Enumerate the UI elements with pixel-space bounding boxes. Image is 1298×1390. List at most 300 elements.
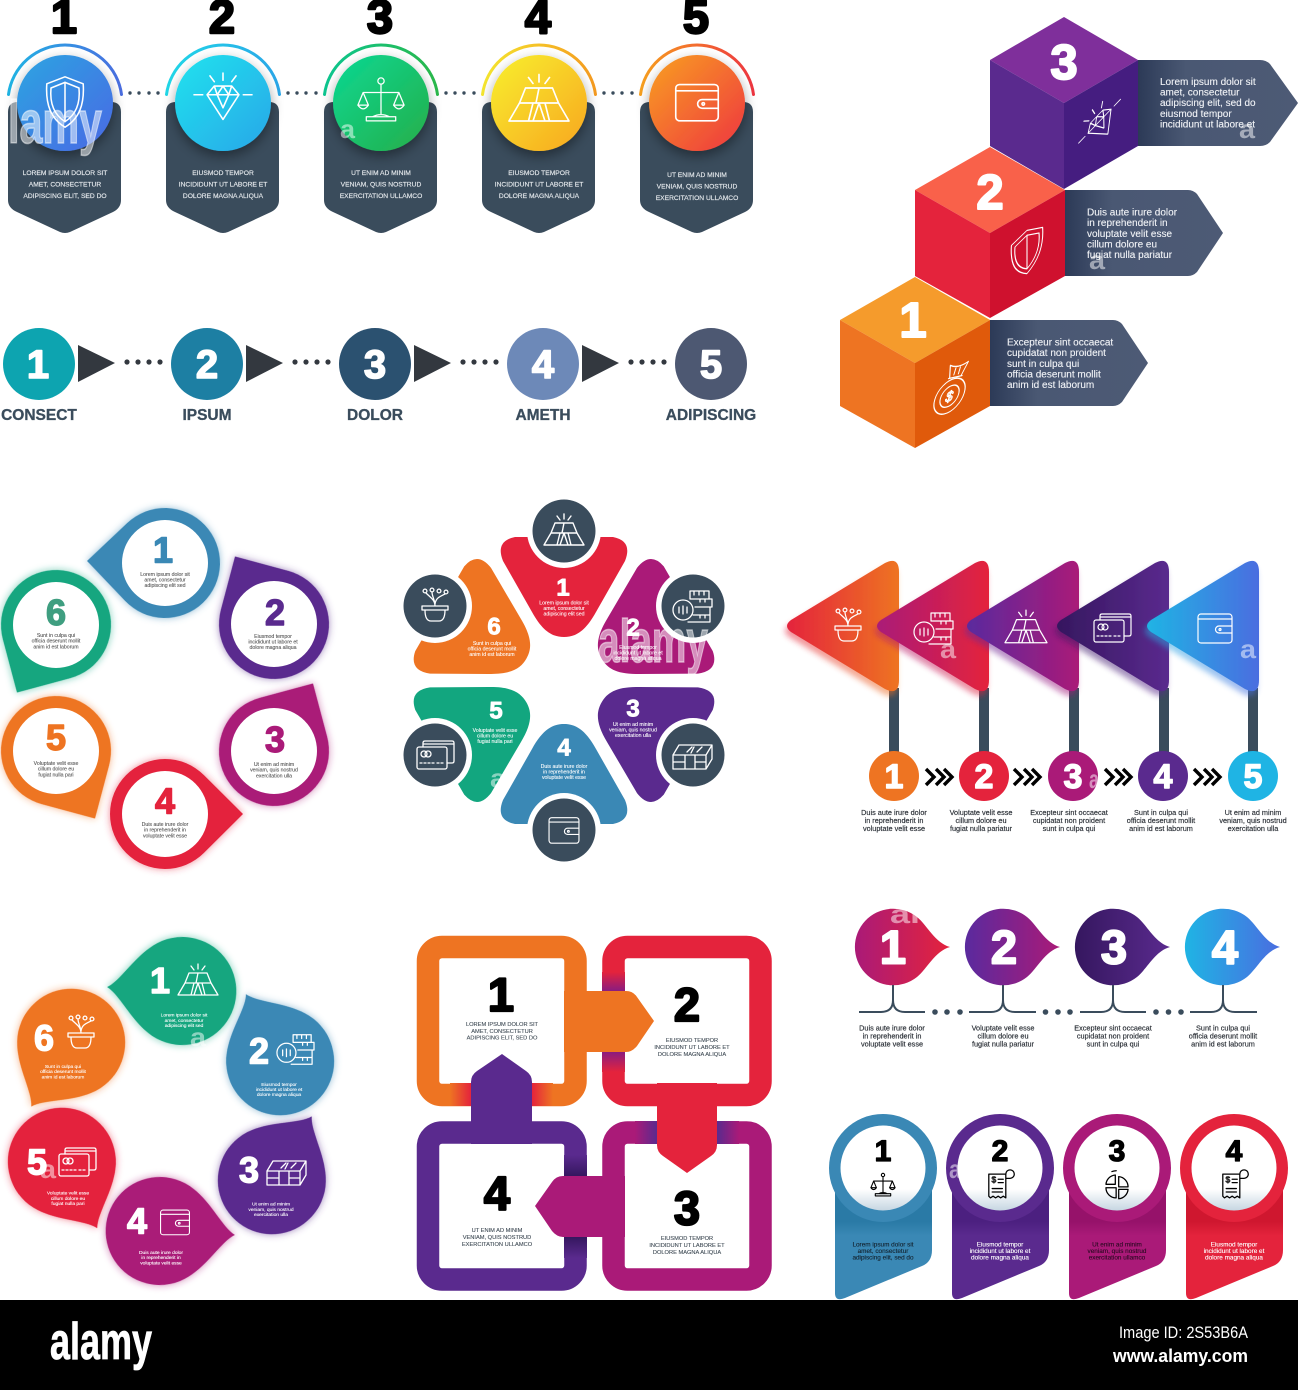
ring 3: exercitation ulla — [256, 773, 292, 779]
petal 1: Lorem ipsum dolor sit — [539, 600, 589, 606]
icon: wallet — [676, 84, 718, 121]
step 4: AMETH — [515, 407, 571, 424]
ring 2: Eiusmod tempor — [254, 634, 292, 640]
card text 1: LOREM IPSUM DOLOR SIT — [23, 170, 107, 177]
step 4: 4 — [532, 343, 555, 387]
teardrop 2: dolore magna aliqua — [257, 1092, 301, 1098]
petal 4 — [501, 724, 627, 867]
step 5: 5 — [700, 343, 722, 387]
drop 4 — [1185, 909, 1280, 1048]
ring 6: 6 — [46, 592, 66, 633]
drop 1: in reprehenderit in — [863, 1032, 921, 1040]
petal 6: officia deserunt mollit — [468, 646, 517, 652]
chevrons 1 — [926, 769, 952, 785]
callout text 1: anim id est laborum — [1007, 380, 1094, 391]
petal 2: dolore magna aliqua — [614, 656, 662, 662]
teardrop 2 — [198, 970, 353, 1134]
step 4 — [507, 328, 579, 424]
ring 5 — [0, 676, 143, 846]
connector dots 1 — [128, 91, 160, 95]
card text 4: INCIDIDUNT UT LABORE ET — [495, 182, 583, 188]
arc 3 — [324, 45, 438, 94]
callout text 3: Lorem ipsum dolor sit — [1160, 77, 1256, 88]
petal 4: voluptate velit esse — [542, 775, 586, 781]
flag 5 — [1147, 561, 1259, 691]
ring 2: 2 — [265, 592, 285, 633]
teardrop 5: Voluptate velit esse — [47, 1190, 89, 1196]
step text 5: exercitation ulla — [1228, 824, 1279, 833]
pin card 3: 3 — [1109, 1135, 1125, 1168]
watermarks: a — [40, 1154, 57, 1184]
ring 1: Lorem ipsum dolor sit — [140, 572, 190, 578]
ring 2: incididunt ut labore et — [248, 640, 298, 646]
column 1 — [8, 0, 122, 233]
cube 3: 3 — [1050, 36, 1078, 90]
pin card 4 — [1180, 1114, 1288, 1299]
arc 1 — [8, 45, 122, 94]
connector dots 3 — [444, 91, 476, 95]
step text 1: in reprehenderit in — [865, 816, 923, 825]
cube 1 — [840, 277, 990, 448]
card text 3: VENIAM, QUIS NOSTRUD — [341, 182, 421, 188]
callout text 1: Excepteur sint occaecat — [1007, 338, 1113, 348]
footer logo: alamy — [50, 1313, 152, 1371]
teardrop 3: Ut enim ad minim — [252, 1202, 290, 1208]
watermarks: a — [190, 1022, 207, 1052]
teardrop 4: in reprehenderit in — [141, 1255, 181, 1261]
callout text 3: adipiscing elit, sed do — [1160, 98, 1256, 109]
pin card 2: incididunt ut labore et — [970, 1248, 1031, 1255]
step 2 — [171, 328, 243, 424]
drop 4: Sunt in culpa qui — [1196, 1024, 1250, 1032]
ring 5: Voluptate velit esse — [34, 761, 78, 767]
image id: Image ID: 2S53B6A — [1119, 1323, 1249, 1342]
column 5 — [640, 0, 754, 233]
teardrop 3: veniam, quis nostrud — [248, 1207, 294, 1213]
square text 1 — [466, 968, 539, 1042]
callout text 1: sunt in culpa qui — [1007, 359, 1079, 370]
ring 1: 1 — [153, 530, 173, 570]
step text 4: officia deserunt mollit — [1127, 816, 1195, 825]
ring 1: amet, consectetur — [144, 578, 186, 584]
petal 2: 2 — [626, 614, 640, 642]
square text 4: EXERCITATION ULLAMCO — [462, 1242, 533, 1248]
cube 3 — [990, 17, 1138, 189]
square frame 3 — [614, 1132, 760, 1280]
pin card 2: dolore magna aliqua — [971, 1254, 1029, 1262]
watermarks: a — [340, 114, 356, 144]
teardrop 4: voluptate velit esse — [140, 1260, 182, 1266]
icon: scales — [358, 78, 404, 121]
pin card 1: adipiscing elit, sed do — [852, 1254, 914, 1262]
step text 1: Duis aute irure dolor — [861, 808, 927, 817]
petal 5: cillum dolore eu — [477, 734, 513, 740]
pin card 3 — [1063, 1114, 1171, 1299]
watermarks: alamy — [598, 608, 708, 675]
square text 3: DOLORE MAGNA ALIQUA — [653, 1250, 721, 1256]
petal 2 — [570, 554, 730, 714]
panel: four linked rounded squares — [428, 947, 760, 1280]
pin card 2 — [946, 1114, 1054, 1299]
ring 3 — [199, 656, 361, 826]
column 3 — [324, 0, 438, 233]
pin card 1: Lorem ipsum dolor sit — [852, 1242, 914, 1248]
callout text 3: eiusmod tempor — [1160, 109, 1232, 120]
column 4 — [482, 0, 596, 233]
square text 1: AMET, CONSECTETUR — [471, 1029, 533, 1035]
connector shading — [450, 972, 739, 1258]
circle 2 — [175, 55, 271, 151]
arc 2 — [166, 45, 280, 94]
step text 4: Sunt in culpa qui — [1134, 808, 1188, 817]
flag 2 — [877, 561, 989, 691]
square frame 4 — [428, 1132, 576, 1280]
connector dots 2 — [286, 91, 318, 95]
ring 1: adipiscing elit sed — [145, 583, 186, 589]
arrow: red connector — [657, 1083, 717, 1173]
step 3 — [339, 328, 411, 424]
square text 3: INCIDIDUNT UT LABORE ET — [649, 1243, 725, 1249]
petal 1 — [501, 494, 627, 637]
drop 3: sunt in culpa qui — [1087, 1040, 1140, 1048]
panel: five numbered circles with labelled shields — [8, 0, 754, 233]
watermarks: a — [1089, 764, 1099, 794]
step 2: IPSUM — [182, 407, 232, 424]
arrow and dots 1 — [78, 345, 163, 382]
callout text 1: cupidatat non proident — [1007, 348, 1106, 359]
square text 2 — [654, 978, 730, 1058]
ring 5: 5 — [46, 717, 66, 758]
drop 1 — [855, 909, 950, 1048]
step text 1: voluptate velit esse — [863, 824, 925, 833]
flag 4 — [1057, 561, 1169, 691]
teardrop 3: exercitation ulla — [254, 1212, 288, 1218]
cube 2: 2 — [976, 166, 1004, 220]
circle 4 — [491, 55, 587, 151]
ring 4: voluptate velit esse — [143, 833, 187, 839]
square text 4: VENIAM, QUIS NOSTRUD — [463, 1235, 531, 1241]
ring 6 — [0, 550, 131, 720]
drop 3: 3 — [1101, 920, 1127, 974]
flag pole 1 — [889, 688, 899, 754]
ring 2: dolore magna aliqua — [249, 645, 297, 651]
card text 1: AMET, CONSECTETUR — [29, 182, 101, 188]
teardrop 2: Eiusmod tempor — [261, 1082, 297, 1088]
callout text 2: fugiat nulla pariatur — [1087, 250, 1173, 261]
drop 4: 4 — [1212, 920, 1238, 974]
petal 1: 1 — [556, 574, 570, 602]
teardrop 2: 2 — [249, 1030, 269, 1072]
pin card 4: dolore magna aliqua — [1205, 1254, 1263, 1262]
drop 3: Excepteur sint occaecat — [1074, 1024, 1152, 1032]
column 2 — [166, 0, 280, 233]
petal 2: incididunt ut labore et — [613, 650, 663, 656]
square text 3 — [649, 1182, 725, 1256]
step circle 3: 3 — [1064, 758, 1082, 796]
pin card 3: veniam, quis nostrud — [1088, 1248, 1147, 1255]
watermarks: a — [1240, 634, 1257, 664]
step text 2: cillum dolore eu — [955, 816, 1007, 825]
pin card 1: amet, consectetur — [858, 1248, 909, 1255]
square text 1: LOREM IPSUM DOLOR SIT — [466, 1022, 539, 1028]
petal 4: in reprehenderit in — [543, 770, 585, 776]
teardrop 4: 4 — [127, 1200, 147, 1242]
drop 2: fugiat nulla pariatur — [972, 1040, 1035, 1048]
watermarks — [8, 89, 1257, 1184]
circle 1 — [17, 55, 113, 151]
callout arrow 1 — [990, 320, 1148, 406]
card text 4: EIUSMOD TEMPOR — [508, 170, 570, 177]
teardrop 3: 3 — [239, 1150, 259, 1190]
flag 3 — [967, 561, 1079, 691]
square text 4: 4 — [484, 1166, 510, 1220]
square text 1: ADIPISCING ELIT, SED DO — [467, 1036, 538, 1042]
petal 3: veniam, quis nostrud — [609, 728, 657, 734]
step circle 1 — [869, 751, 919, 801]
teardrop 1: adipiscing elit sed — [165, 1023, 204, 1029]
petal 5 — [398, 647, 558, 807]
card text 3: UT ENIM AD MINIM — [351, 170, 411, 177]
square text 3: EIUSMOD TEMPOR — [661, 1236, 713, 1242]
cube 2 — [915, 147, 1065, 318]
panel: gradient drops timeline — [855, 909, 1280, 1048]
square text 2: EIUSMOD TEMPOR — [666, 1038, 718, 1044]
pin card 1 — [829, 1114, 937, 1299]
teardrop 6: anim id est laborum — [42, 1074, 84, 1080]
ring 4 — [110, 759, 243, 869]
petal 6: anim id est laborum — [469, 652, 515, 658]
petal 2: Eiusmod tempor — [619, 645, 657, 651]
card text 2: INCIDIDUNT UT LABORE ET — [179, 182, 267, 188]
arrow: magenta connector — [535, 1176, 625, 1237]
step 5 — [666, 328, 756, 424]
step text 2: Voluptate velit esse — [950, 808, 1012, 817]
callout text 2: Duis aute irure dolor — [1087, 208, 1178, 218]
icon: shield — [47, 77, 83, 127]
teardrop 1: Lorem ipsum dolor sit — [161, 1012, 208, 1018]
panel: four pin cards — [829, 1114, 1288, 1299]
connector dots 4 — [602, 91, 634, 95]
drop 1: voluptate velit esse — [861, 1040, 923, 1048]
ring 2 — [187, 529, 349, 699]
drop 1: Duis aute irure dolor — [859, 1024, 925, 1032]
square text 1: 1 — [488, 968, 514, 1021]
panel: six solid teardrops — [0, 933, 358, 1289]
flag 1 — [787, 561, 899, 691]
ring 3: veniam, quis nostrud — [250, 768, 298, 774]
ring 3: 3 — [265, 719, 285, 760]
pin card 1: 1 — [875, 1135, 891, 1168]
step 1: 1 — [27, 343, 49, 387]
petal 3 — [570, 647, 730, 807]
card text 4: DOLORE MAGNA ALIQUA — [499, 193, 580, 200]
arrow and dots 2 — [246, 345, 331, 382]
step text 3: sunt in culpa qui — [1043, 824, 1096, 833]
pin card 3: Ut enim ad minim — [1092, 1242, 1142, 1248]
pin card 2: 2 — [992, 1135, 1008, 1168]
drop 4: officia deserunt mollit — [1189, 1032, 1257, 1040]
pin card 2: Eiusmod tempor — [977, 1242, 1024, 1248]
step circle 2: 2 — [975, 758, 993, 796]
chevrons 3 — [1105, 769, 1131, 785]
watermarks: a — [490, 763, 507, 793]
step 2: 2 — [196, 343, 218, 387]
teardrop 6: Sunt in culpa qui — [45, 1064, 81, 1070]
teardrop 6: 6 — [34, 1018, 54, 1058]
card text 1: ADIPISCING ELIT, SED DO — [23, 193, 107, 200]
petal 5: fugiat nulla pari — [477, 739, 513, 745]
card text 2: EIUSMOD TEMPOR — [192, 170, 254, 177]
chevrons 2 — [1014, 769, 1040, 785]
square text 2: DOLORE MAGNA ALIQUA — [658, 1052, 726, 1058]
drop 4: anim id est laborum — [1191, 1040, 1255, 1048]
callout text 2: voluptate velit esse — [1087, 229, 1172, 240]
petal 3: exercitation ulla — [615, 733, 651, 739]
teardrop 6: officia deserunt mollit — [40, 1069, 87, 1075]
arc 5 — [640, 45, 754, 94]
arrow and dots 4 — [582, 345, 667, 382]
panel: six petals around a hexagon with dark icon circles — [398, 494, 730, 867]
square text 3: 3 — [674, 1182, 700, 1234]
ring 6: anim id est laborum — [33, 644, 79, 650]
connector dots 1 — [932, 1009, 963, 1015]
connector dots 2 — [1043, 1009, 1073, 1015]
watermarks: a — [940, 634, 957, 664]
card text 5: UT ENIM AD MINIM — [667, 172, 727, 179]
card text 5: VENIAM, QUIS NOSTRUD — [657, 184, 737, 190]
step circle 2 — [959, 751, 1009, 801]
step circle 1: 1 — [885, 758, 903, 796]
step text 3: cupidatat non proident — [1033, 816, 1105, 825]
panel: process steps with arrows — [1, 328, 756, 424]
ring 4: in reprehenderit in — [144, 828, 186, 834]
drop 3: cupidatat non proident — [1077, 1032, 1149, 1040]
teardrop 4 — [103, 1174, 238, 1289]
watermarks: lamy — [8, 89, 102, 156]
petal 1: adipiscing elit sed — [544, 612, 585, 618]
arrow: orange connector — [564, 991, 654, 1052]
petal 6: Sunt in culpa qui — [473, 641, 511, 647]
footer bar — [0, 1300, 1298, 1390]
petal 3: Ut enim ad minim — [613, 722, 653, 728]
arc 4 — [482, 45, 596, 94]
flag pole 5 — [1248, 688, 1258, 754]
text card 2 — [166, 102, 279, 233]
pin card 4: 4 — [1226, 1135, 1243, 1168]
drop 2: 2 — [991, 920, 1017, 974]
callout text 3: amet, consectetur — [1160, 88, 1240, 98]
step text 3: Excepteur sint occaecat — [1030, 808, 1108, 817]
teardrop 6 — [0, 968, 146, 1135]
drop 1: 1 — [880, 920, 906, 974]
callout arrow 3 — [1138, 60, 1298, 146]
petal 6: 6 — [487, 614, 501, 640]
ring 3: Ut enim ad minim — [254, 762, 294, 768]
teardrop 1: 1 — [150, 960, 170, 1001]
petal 5: Voluptate velit esse — [473, 728, 517, 734]
ring 4: 4 — [155, 780, 175, 822]
ring 5: fugiat nulla pari — [38, 772, 74, 778]
callout arrow 2 — [1065, 190, 1223, 276]
step 1 — [1, 328, 77, 424]
ring 6: officia deserunt mollit — [32, 639, 81, 645]
petal 4: Duis aute irure dolor — [541, 764, 588, 770]
step circle 4 — [1138, 751, 1188, 801]
step circle 5: 5 — [1244, 758, 1262, 796]
step circle 4: 4 — [1154, 758, 1173, 796]
step 5: ADIPISCING — [666, 407, 756, 424]
drop 2: cillum dolore eu — [977, 1032, 1029, 1040]
teardrop 5: fugiat nulla pari — [51, 1201, 85, 1207]
teardrop 5 — [0, 1089, 145, 1254]
watermarks: al — [890, 899, 920, 929]
flag pole 4 — [1159, 688, 1169, 754]
callout text 2: cillum dolore eu — [1087, 239, 1157, 250]
circle 5 — [649, 55, 745, 151]
teardrop 4: Duis aute irure dolor — [139, 1250, 183, 1256]
circle 3 — [333, 55, 429, 151]
petal 5: 5 — [489, 698, 503, 724]
step 3: 3 — [364, 343, 386, 387]
callout text 2: in reprehenderit in — [1087, 218, 1168, 229]
connector dots 3 — [1153, 1009, 1184, 1015]
chevrons 4 — [1194, 769, 1220, 785]
step circle 3 — [1048, 751, 1098, 801]
watermarks: a — [949, 1154, 961, 1184]
ring 1 — [86, 506, 221, 619]
step text 2: fugiat nulla pariatur — [950, 824, 1013, 833]
ring 6: Sunt in culpa qui — [37, 633, 75, 639]
panel: six drop-shaped rings — [0, 506, 361, 869]
step text 5: veniam, quis nostrud — [1219, 816, 1287, 825]
website: www.alamy.com — [1112, 1346, 1248, 1366]
card text 3: EXERCITATION ULLAMCO — [340, 193, 422, 200]
flag pole 3 — [1069, 688, 1079, 754]
square text 4: UT ENIM AD MINIM — [472, 1228, 523, 1234]
text card 1 — [8, 102, 121, 233]
teardrop 1: amet, consectetur — [165, 1018, 204, 1024]
text card 3 — [324, 102, 437, 233]
teardrop 2: incididunt ut labore et — [256, 1087, 303, 1093]
teardrop 1 — [104, 933, 239, 1048]
drop 2 — [965, 909, 1060, 1048]
step 3: DOLOR — [347, 407, 403, 424]
card text 5: EXERCITATION ULLAMCO — [656, 195, 738, 202]
square text 2: INCIDIDUNT UT LABORE ET — [654, 1045, 730, 1051]
teardrop 5: 5 — [27, 1142, 47, 1182]
petal 1: amet, consectetur — [543, 606, 585, 612]
text card 4 — [482, 102, 595, 233]
square frame 2 — [614, 947, 760, 1095]
watermarks: a — [1239, 114, 1256, 144]
text card 5 — [640, 102, 753, 233]
icon: diamond — [194, 73, 252, 119]
ring 5: cillum dolore eu — [38, 767, 74, 773]
drop 3 — [1074, 909, 1170, 1048]
icon: gold bars — [509, 74, 569, 121]
arrow: purple connector — [471, 1054, 532, 1144]
teardrop 3 — [197, 1088, 358, 1255]
square text 2: 2 — [674, 978, 700, 1031]
watermarks: a — [1089, 245, 1106, 275]
petal 3: 3 — [626, 696, 640, 722]
step 1: CONSECT — [1, 407, 77, 424]
petal 4: 4 — [557, 734, 571, 762]
arrow and dots 3 — [414, 345, 499, 382]
step text 4: anim id est laborum — [1129, 824, 1193, 833]
step text 5: Ut enim ad minim — [1225, 808, 1281, 817]
step circle 5 — [1228, 751, 1278, 801]
